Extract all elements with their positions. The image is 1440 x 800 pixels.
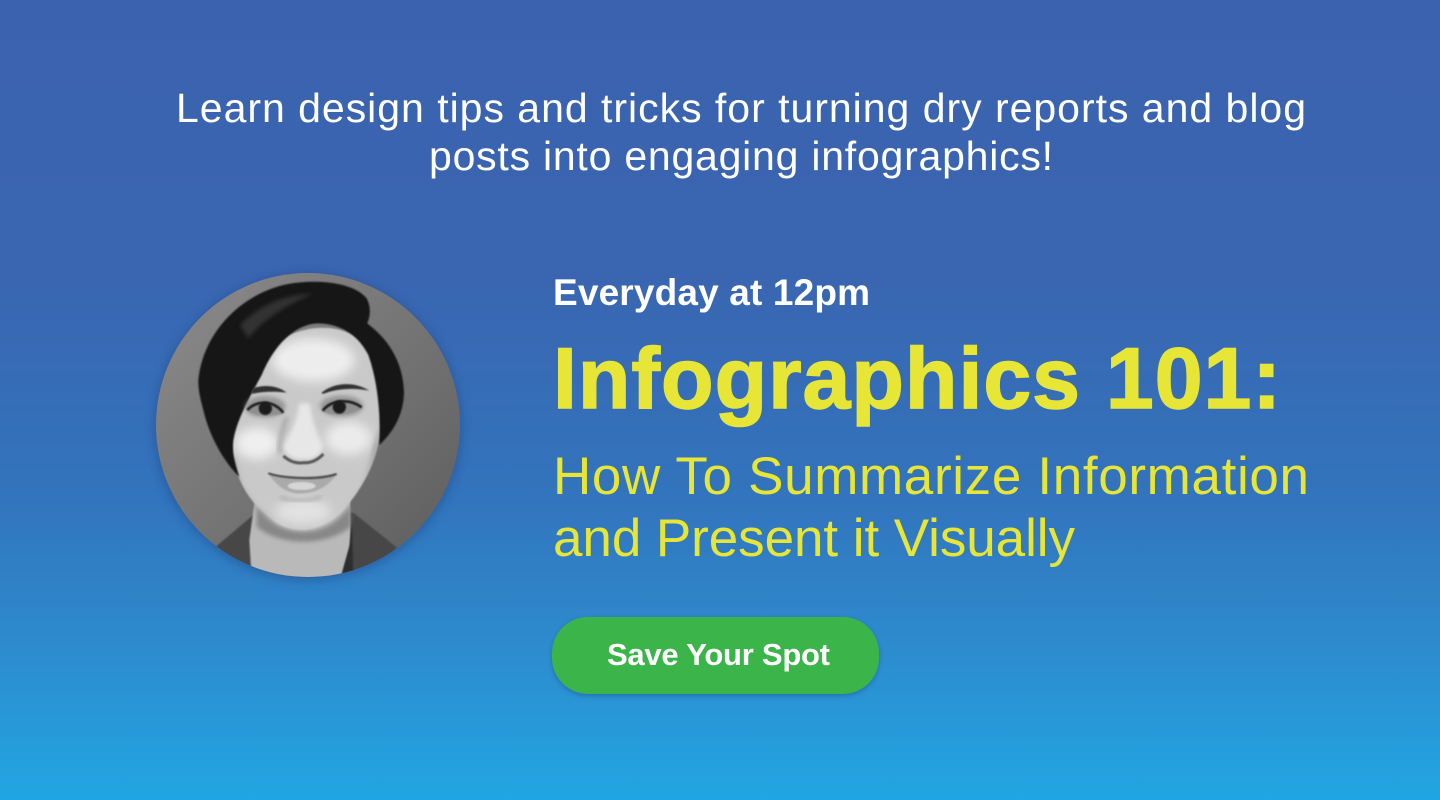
subtitle: How To Summarize Information	[553, 447, 1309, 506]
subtitle: and Present it Visually	[553, 509, 1076, 568]
subtitle	[553, 447, 1309, 568]
chin crease	[280, 497, 322, 501]
forehead highlight	[272, 338, 355, 382]
nose side shadow	[280, 417, 287, 453]
mouth	[268, 473, 337, 493]
neck	[248, 501, 352, 577]
face	[233, 328, 381, 530]
nose	[283, 403, 323, 459]
title: Infographics 101:	[553, 331, 1281, 427]
jaw shadow	[257, 505, 351, 542]
eyebrows	[252, 386, 287, 394]
clothing	[215, 513, 397, 580]
eye sockets	[244, 396, 286, 417]
hair	[198, 282, 404, 477]
cheek highlights	[235, 427, 278, 459]
eyes	[248, 409, 283, 416]
intro text	[176, 85, 1306, 179]
intro text: Learn design tips and tricks for turning dry reports and blog	[176, 85, 1306, 131]
collar shadow	[341, 520, 353, 575]
side face shading	[234, 458, 270, 518]
intro text: posts into engaging infographics!	[429, 133, 1053, 179]
button: save your spot: Save Your Spot	[607, 637, 830, 672]
schedule line: Everyday at 12pm	[553, 272, 870, 313]
button: save your spot	[552, 617, 879, 696]
hair highlight	[240, 293, 313, 338]
portrait photo	[150, 270, 470, 590]
chin highlight	[275, 499, 332, 524]
